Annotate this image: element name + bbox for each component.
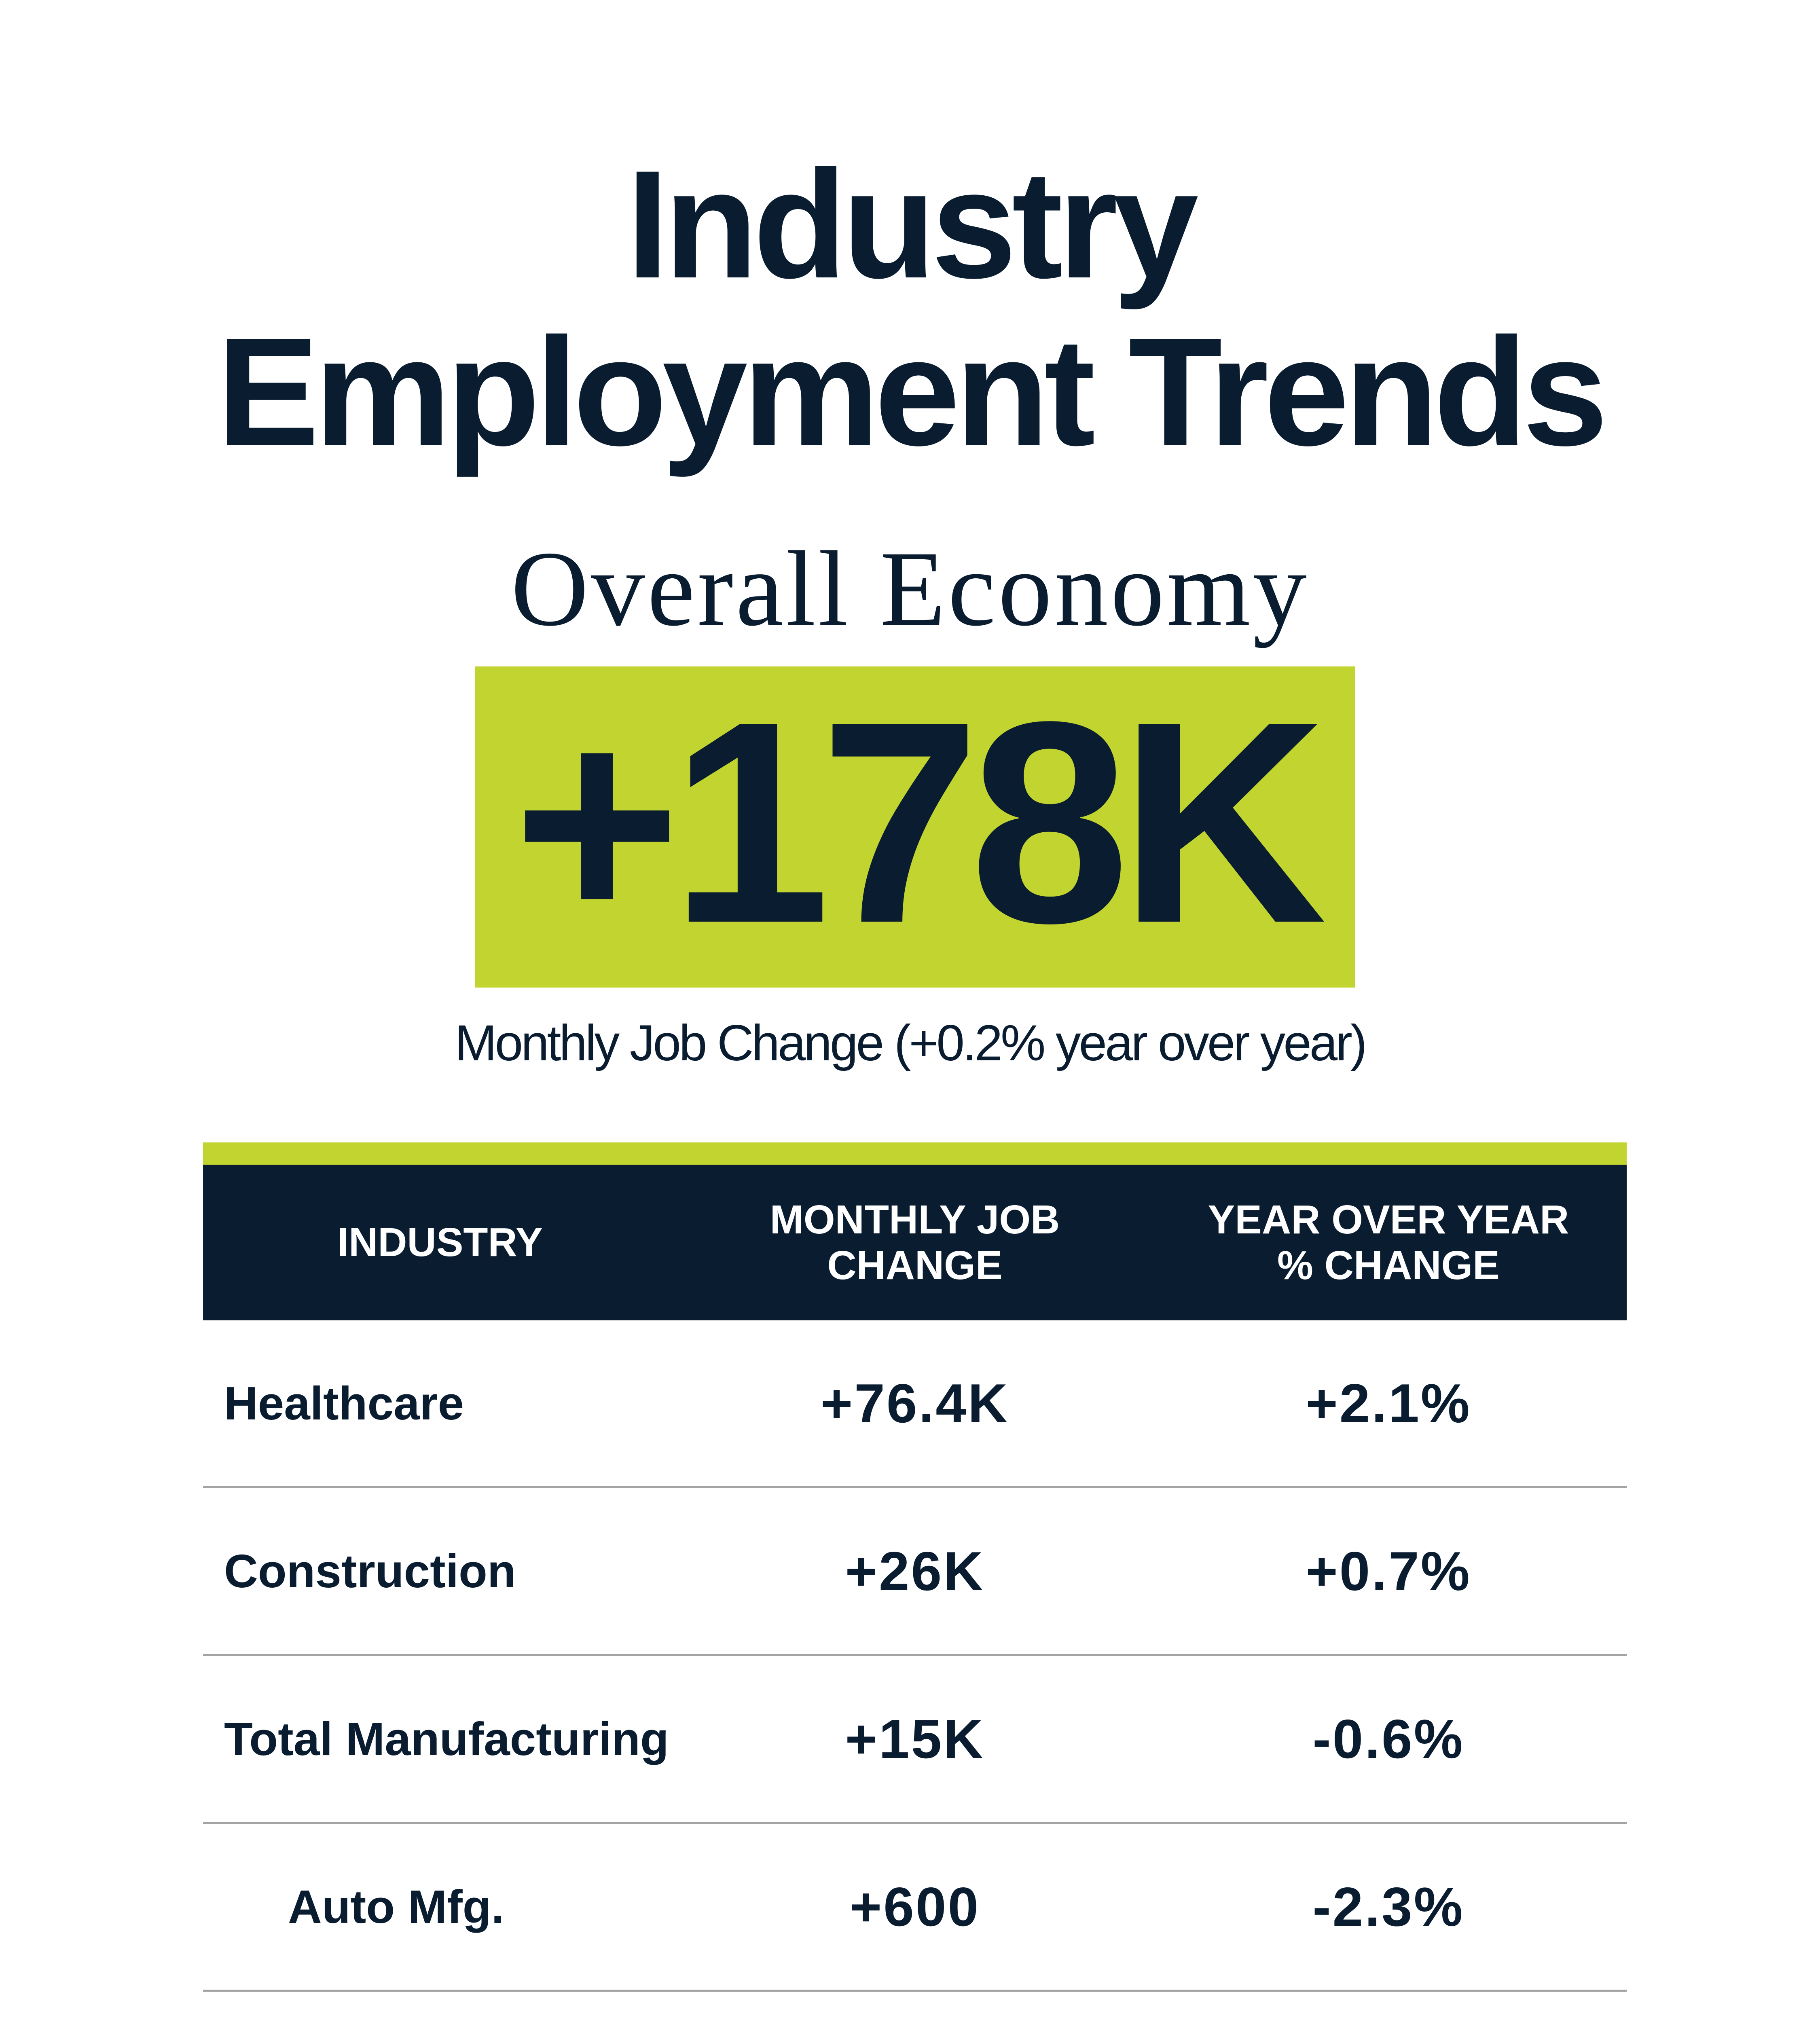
row: Healthcare: +2.1% <box>1306 1373 1471 1434</box>
row: Total Manufacturing <box>203 1656 1627 1824</box>
highlight box: +178K: +178K <box>513 662 1316 983</box>
table header <box>203 1165 1627 1320</box>
table header: INDUSTRY <box>337 1220 543 1265</box>
row: Construction: +26K <box>845 1540 984 1602</box>
table <box>0 1142 1820 2022</box>
row: Auto Mfg: +600 <box>850 1876 980 1937</box>
row: Aerospace Mfg <box>203 1992 1627 2022</box>
row: Total Manufacturing: Total Manufacturing <box>224 1713 669 1765</box>
accent bar <box>203 1142 1627 1165</box>
subtitle: overall economy: Overall Economy <box>511 529 1309 648</box>
title <box>0 148 1820 471</box>
title: Industry <box>626 138 1194 310</box>
row: Construction <box>203 1488 1627 1656</box>
row: Auto Mfg: Auto Mfg. <box>288 1880 504 1933</box>
table header: YEAR OVER YEAR <box>1208 1197 1569 1242</box>
table header: % CHANGE <box>1277 1242 1500 1288</box>
row: Auto Mfg: -2.3% <box>1312 1876 1464 1937</box>
row: Total Manufacturing: -0.6% <box>1312 1708 1464 1770</box>
caption: monthly job change: Monthly Job Change (+0.2% year over year) <box>455 1015 1365 1071</box>
row: Healthcare <box>203 1320 1627 1488</box>
row: Healthcare: +76.4K <box>821 1373 1009 1434</box>
table header: MONTHLY JOB <box>770 1197 1060 1242</box>
table header: CHANGE <box>827 1242 1003 1288</box>
row: Auto Mfg <box>203 1824 1627 1992</box>
title: Employment Trends <box>217 306 1603 478</box>
row: Construction: Construction <box>224 1545 516 1597</box>
row: Construction: +0.7% <box>1306 1540 1471 1602</box>
row: Total Manufacturing: +15K <box>845 1708 984 1770</box>
row: Healthcare: Healthcare <box>224 1377 464 1430</box>
